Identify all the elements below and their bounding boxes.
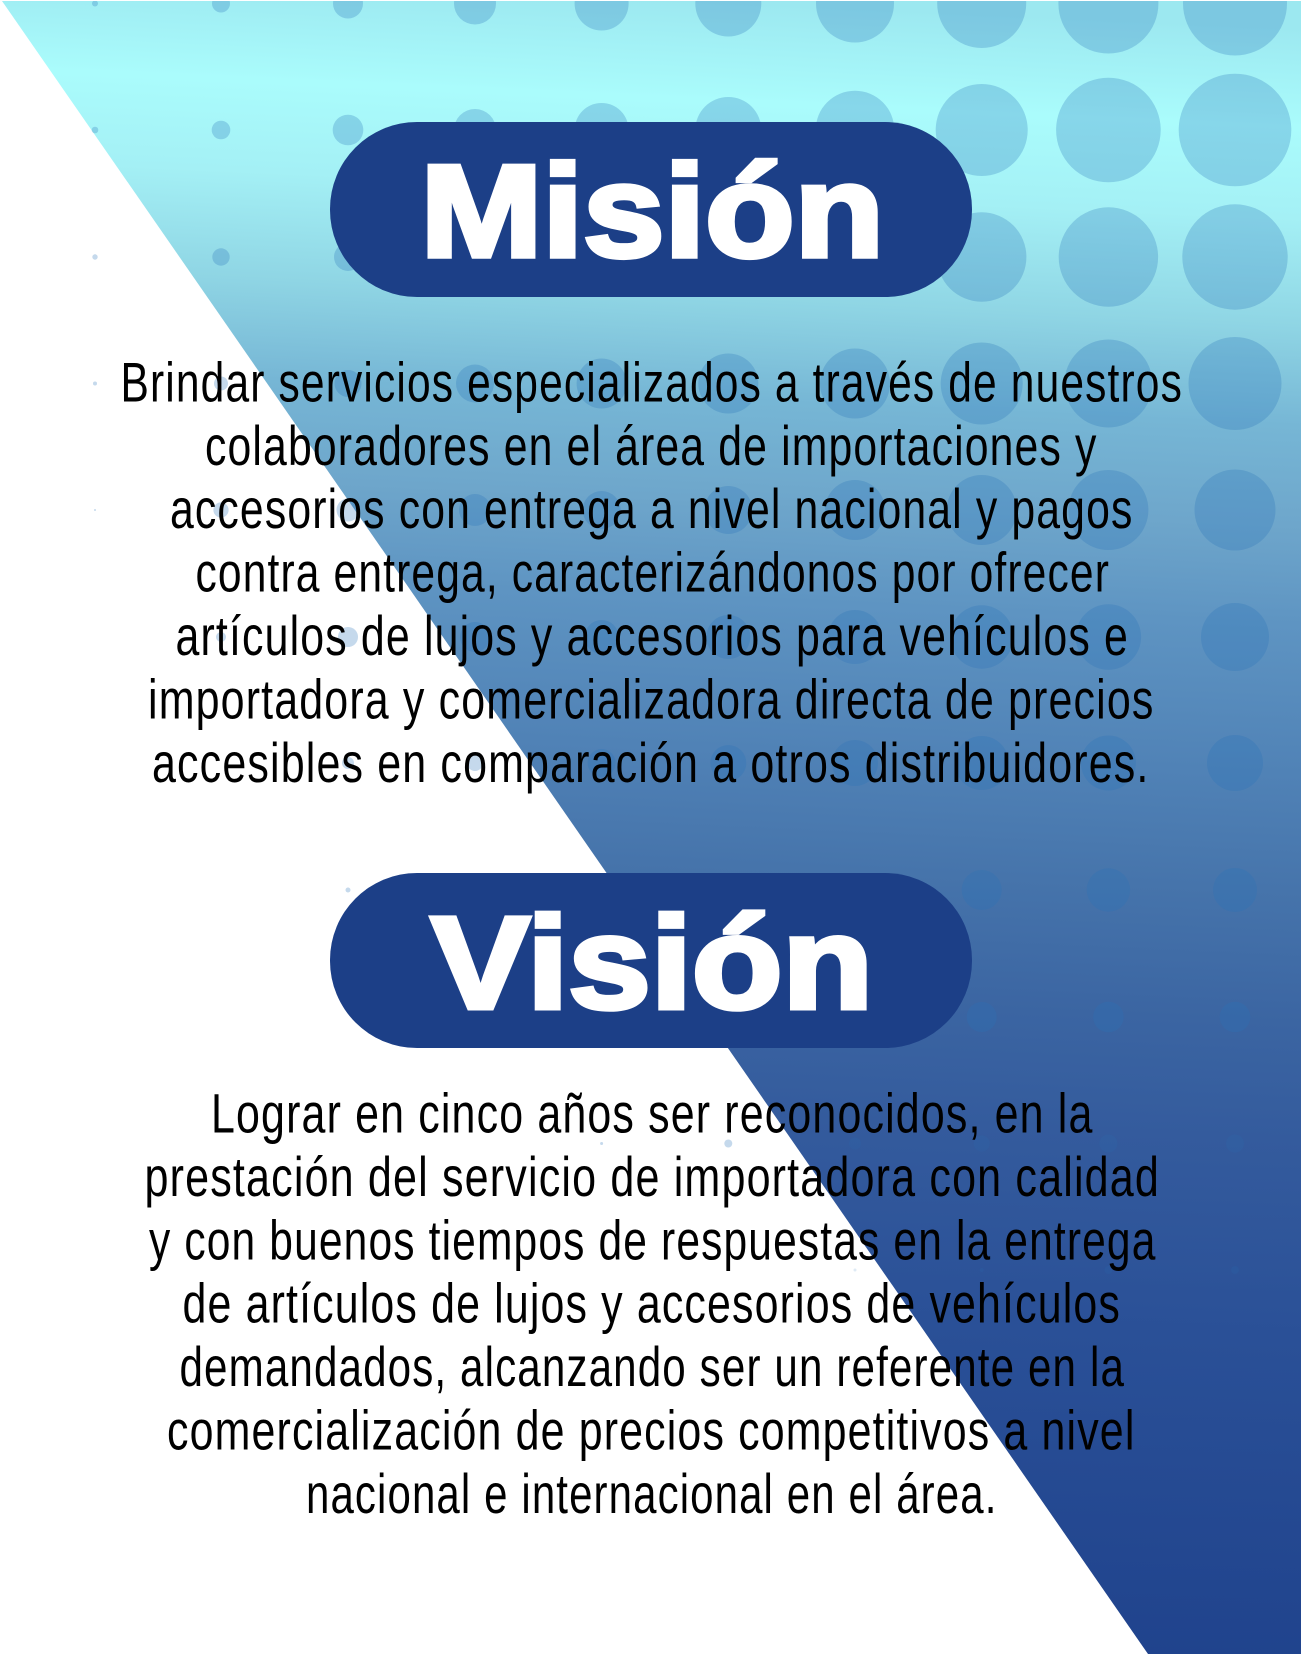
heading: Visión xyxy=(330,873,972,1048)
pill: Misión background xyxy=(330,122,972,297)
text: Misión title: Misión xyxy=(420,137,884,284)
text block: vision statement: nacional e internacional en el área. xyxy=(306,1462,998,1525)
halftone dot pattern xyxy=(92,0,1291,1274)
pill: Visión background xyxy=(330,873,972,1048)
text block: mission statement xyxy=(120,350,1183,794)
text: Visión title: Visión xyxy=(431,889,873,1036)
heading: Misión xyxy=(330,122,972,297)
text block: vision statement xyxy=(144,1082,1160,1525)
